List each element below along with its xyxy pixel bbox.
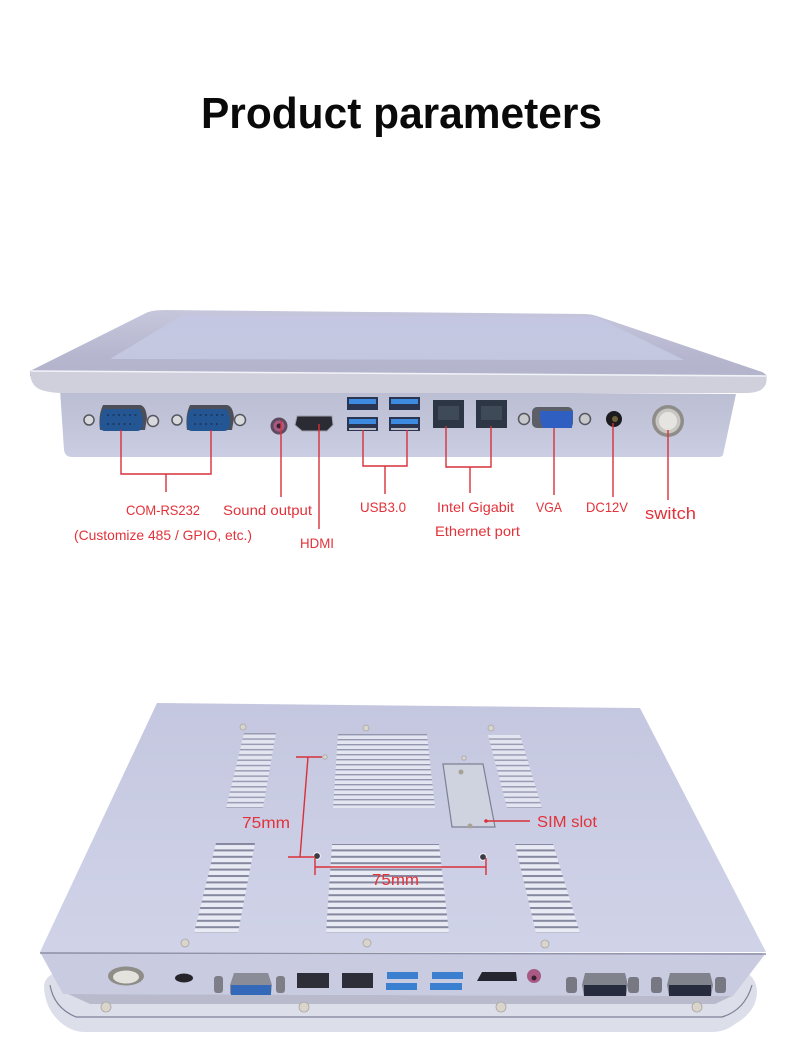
connector: COM port 2 <box>172 405 246 431</box>
label: VGA: VGA <box>536 499 563 515</box>
rear connector: DC jack <box>175 974 193 982</box>
bezel top surface <box>30 310 766 378</box>
connector: DC12V jack <box>606 411 622 427</box>
callouts: red dimension lines for rear view <box>288 757 530 875</box>
connector: HDMI <box>295 416 333 431</box>
touch screen <box>110 315 684 360</box>
panel: side view of panel PC with ports <box>30 310 767 457</box>
rear connector: audio jack <box>527 969 541 983</box>
vent: upper centre <box>333 734 435 808</box>
bezel highlight <box>31 371 766 376</box>
rear connector: VGA <box>214 973 285 995</box>
vent: upper right <box>488 735 542 808</box>
label: switch: switch <box>645 504 696 523</box>
rear connector: HDMI <box>477 972 517 981</box>
vent: lower centre <box>326 844 449 933</box>
label: Sound output: Sound output <box>223 502 312 518</box>
label: DC12V: DC12V <box>586 499 629 515</box>
connector: VGA <box>518 407 590 428</box>
connector: USB3.0 ports <box>347 397 420 431</box>
title: Product parameters <box>201 89 602 138</box>
callouts: red leader lines for side view <box>121 421 668 529</box>
connector: COM port 1 <box>84 405 158 431</box>
rear plate <box>40 703 766 952</box>
label: HDMI: HDMI <box>300 535 334 551</box>
bezel front edge <box>30 371 767 393</box>
label: customize note: (Customize 485 / GPIO, etc.) <box>74 527 252 543</box>
SIM slot window <box>443 764 495 828</box>
screws on rear plate <box>101 724 702 1012</box>
VESA mounting holes <box>314 852 486 860</box>
vent: upper left <box>226 733 276 808</box>
rear connector: COM port <box>566 973 639 996</box>
rear connector: power switch <box>108 966 144 986</box>
body rear housing <box>60 390 736 457</box>
vent: lower left <box>194 843 255 933</box>
bezel groove <box>50 985 752 1017</box>
label: vertical 75mm: 75mm <box>242 815 290 832</box>
bezel base <box>44 972 757 1032</box>
plate edge line <box>40 953 766 954</box>
rear connector: COM port <box>651 973 726 996</box>
bezel shadow <box>68 994 732 1004</box>
panel: rear view of panel PC <box>40 703 766 1032</box>
rear connector: Ethernet ports <box>297 973 373 988</box>
label: Intel Gigabit: Intel Gigabit <box>437 499 514 515</box>
label: COM-RS232: COM-RS232 <box>126 502 200 518</box>
label: Ethernet port: Ethernet port <box>435 523 520 539</box>
front face <box>40 952 766 996</box>
connector: Ethernet ports <box>433 400 507 428</box>
label: horizontal 75mm: 75mm <box>372 872 419 889</box>
vent: lower right <box>515 844 580 933</box>
label: SIM slot: SIM slot <box>537 814 598 831</box>
rear connector: USB3.0 ports <box>386 972 463 990</box>
connector: audio jack <box>270 418 288 434</box>
label: USB3.0: USB3.0 <box>360 499 406 515</box>
connector: power switch <box>652 405 684 437</box>
